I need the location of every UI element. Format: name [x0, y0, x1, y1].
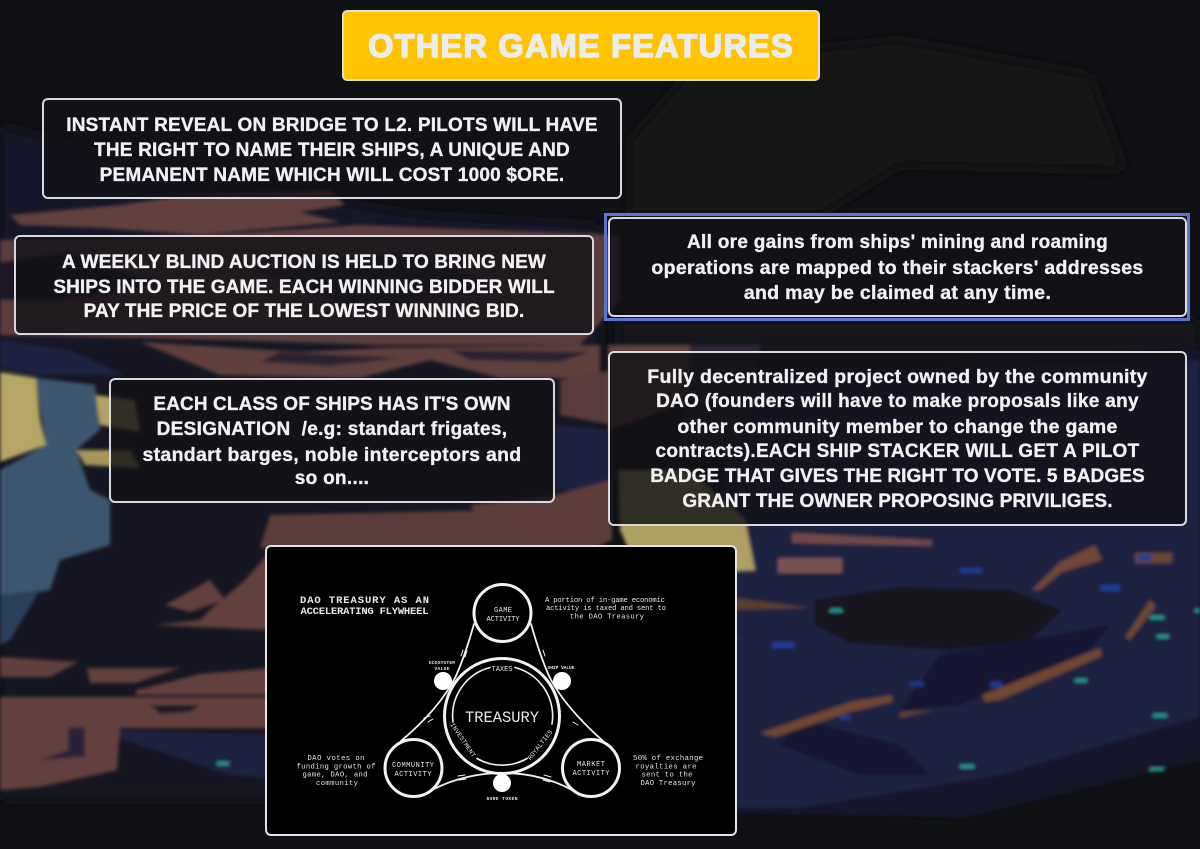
diagram labels: DAO votes on	[308, 755, 364, 763]
panel: ore gains	[608, 217, 1187, 317]
yellow	[0, 372, 46, 462]
panel: weekly blind auction: PAY THE PRICE OF THE LOWEST WINNING BID.	[84, 301, 524, 322]
brown top	[10, 190, 345, 235]
diagram labels: TAXES	[492, 666, 512, 674]
panel: weekly blind auction: SHIPS INTO THE GAME. EACH WINNING BIDDER WILL	[53, 277, 555, 298]
panel: instant reveal and ship naming: PEMANENT NAME WHICH WILL COST 1000 $ORE.	[100, 165, 564, 186]
diagram labels: VALUE	[434, 666, 450, 672]
right brown/orange details	[792, 533, 932, 546]
diagram labels: A portion of in-game economic	[545, 597, 665, 605]
panel: decentralized DAO: DAO (founders will have to make proposals like any	[656, 391, 1139, 412]
diagram labels: 50% of exchange	[633, 755, 703, 763]
nodes	[434, 672, 571, 792]
diagram: DAO treasury flywheel	[265, 545, 737, 836]
diagram labels: game, DAO, and	[302, 772, 368, 780]
panel: instant reveal and ship naming: THE RIGHT TO NAME THEIR SHIPS, A UNIQUE AND	[94, 140, 570, 161]
diagram labels: COMMUNITY	[392, 762, 435, 770]
title banner: OTHER GAME FEATURES	[368, 28, 794, 64]
panel: ore gains: All ore gains from ships' mining and roaming	[687, 232, 1108, 253]
diagram labels: ACCELERATING FLYWHEEL	[300, 606, 428, 618]
teal and blue sparks	[217, 609, 1200, 771]
panel: ore gains: operations are mapped to their stackers' addresses	[651, 257, 1144, 279]
panel: weekly blind auction	[14, 235, 594, 335]
selection outline around ore gains panel	[604, 213, 1190, 321]
dark outer hull	[600, 350, 1200, 817]
panel: decentralized DAO: other community member to change the game	[677, 416, 1118, 438]
diagram labels: sent to the	[642, 772, 692, 780]
panel: ship class designation: so on....	[295, 468, 369, 489]
panel: decentralized DAO: GRANT THE OWNER PROPOSING PRIVILIGES.	[682, 491, 1113, 512]
panel: decentralized DAO: BADGE THAT GIVES THE RIGHT TO VOTE. 5 BADGES	[650, 466, 1145, 487]
diagram labels: ACTIVITY	[394, 771, 432, 779]
diagram labels: GAME	[494, 607, 512, 615]
blue-gray	[0, 378, 110, 600]
diagram labels: MARKET	[577, 761, 605, 769]
lower-left brown	[165, 580, 225, 612]
panel: ship class designation: standart barges, noble interceptors and	[142, 444, 522, 466]
navy hull	[700, 360, 1200, 808]
panel: ore gains: and may be claimed at any time.	[744, 282, 1051, 304]
diagram labels: ACTIVITY	[486, 616, 520, 624]
panel: ship class designation: DESIGNATION /e.g: standart frigates,	[157, 419, 507, 440]
panel: decentralized DAO	[608, 351, 1187, 526]
panel: ship class designation	[109, 378, 555, 503]
panel: decentralized DAO: Fully decentralized project owned by the community	[647, 366, 1148, 388]
diagram labels: activity is taxed and sent to	[546, 605, 666, 613]
diagram labels: funding growth of	[296, 764, 376, 772]
panel: decentralized DAO: contracts).EACH SHIP STACKER WILL GET A PILOT	[656, 441, 1139, 462]
diagram labels: community	[316, 780, 359, 788]
diagram labels: royalties are	[636, 764, 696, 772]
diagram labels: SHIP VALUE	[548, 665, 575, 671]
title banner	[342, 10, 820, 81]
diagram labels: ROYALTIES	[527, 729, 554, 762]
panel: instant reveal and ship naming	[42, 98, 622, 199]
panel: weekly blind auction: A WEEKLY BLIND AUCTION IS HELD TO BRING NEW	[62, 252, 546, 273]
diagram labels: TREASURY	[465, 709, 539, 727]
diagram labels: $ORE TOKEN	[486, 796, 518, 802]
panel: instant reveal and ship naming: INSTANT REVEAL ON BRIDGE TO L2. PILOTS WILL HAVE	[66, 115, 598, 136]
diagram labels: DAO Treasury	[640, 780, 696, 788]
diagram labels: the DAO Treasury	[570, 614, 645, 622]
diagram labels: ECOSYSTEM	[429, 660, 455, 666]
diagram labels: DAO TREASURY AS AN	[300, 595, 429, 607]
diagram labels	[296, 595, 703, 802]
panel: ship class designation: EACH CLASS OF SHIPS HAS IT'S OWN	[153, 394, 511, 415]
diagram labels: INVESTMENT	[448, 722, 477, 759]
diagram labels: ACTIVITY	[572, 770, 610, 778]
